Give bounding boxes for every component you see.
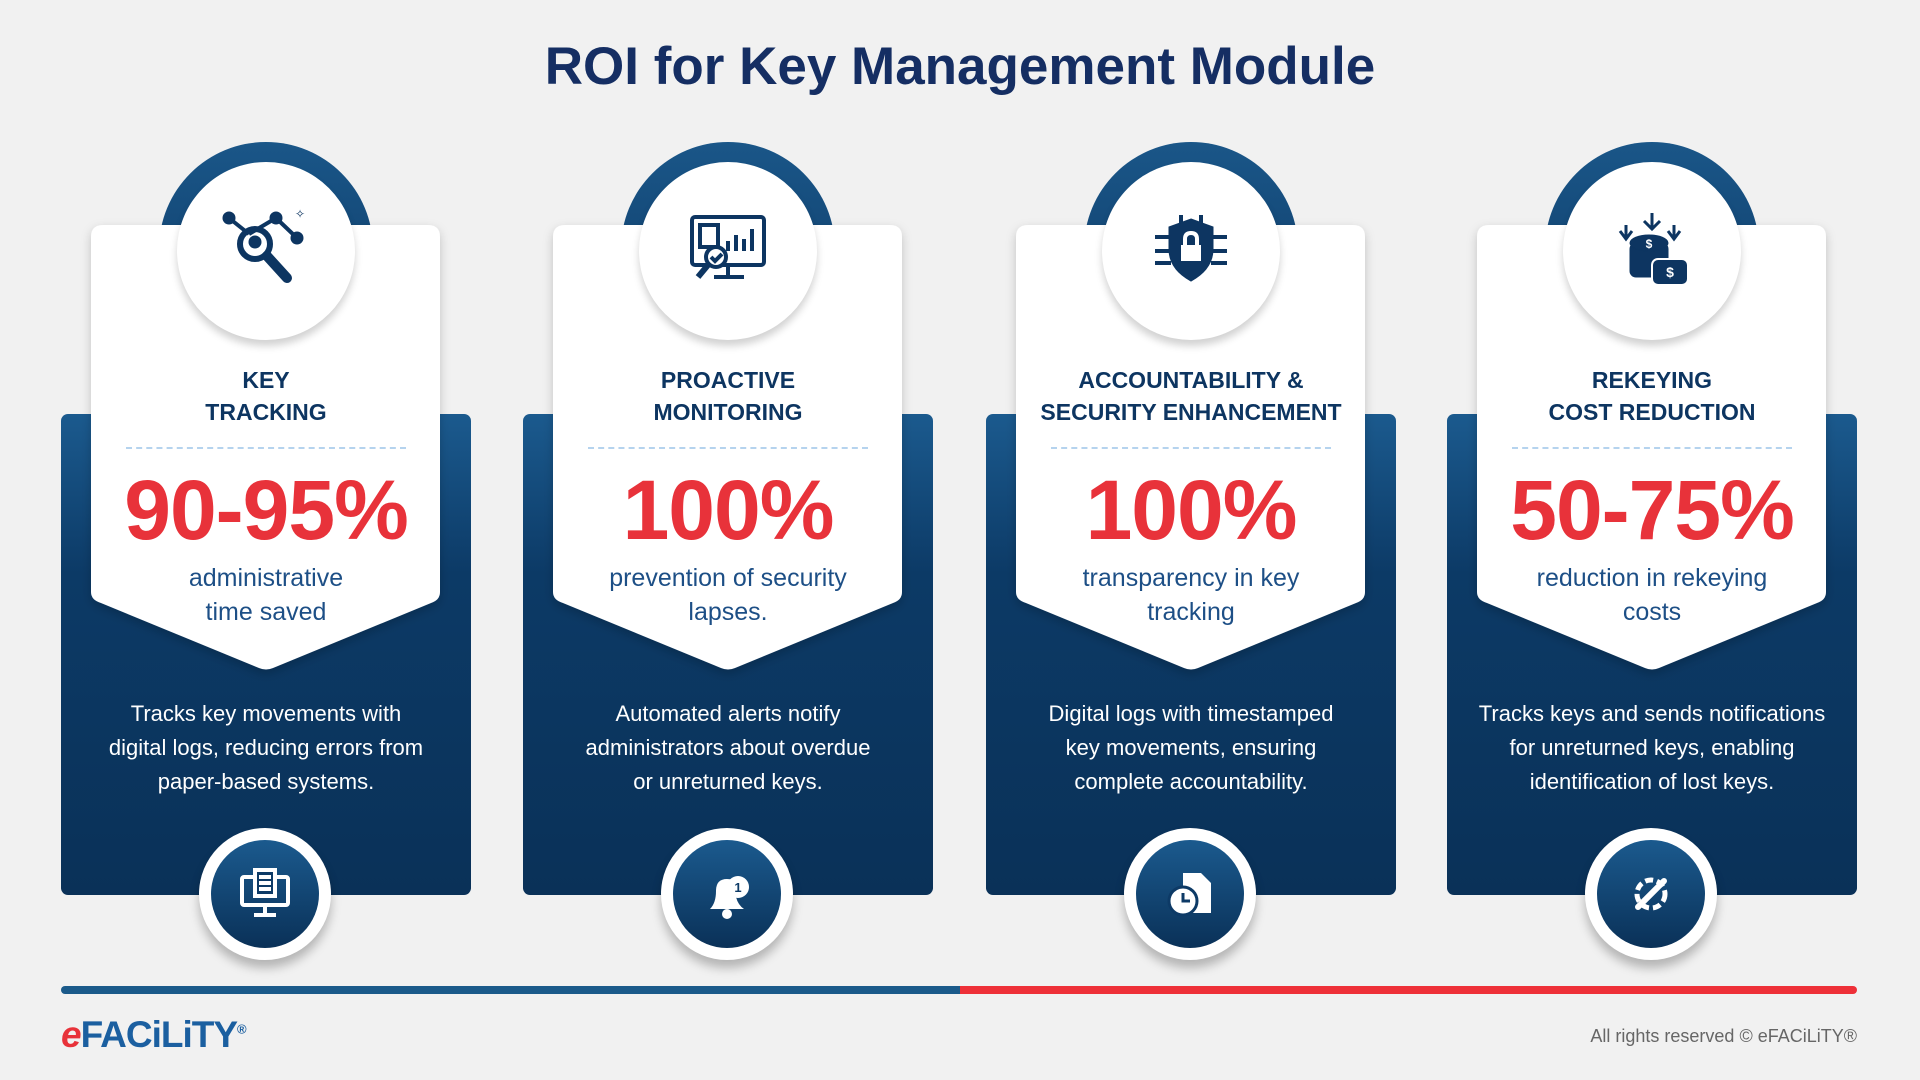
stat: 90-95%	[124, 463, 408, 557]
heading	[1040, 367, 1342, 425]
description: Tracks keys and sends notifications	[1479, 701, 1825, 726]
title: ROI for Key Management Module	[545, 37, 1375, 96]
panel: rekeying cost: reduction in rekeying	[1537, 564, 1767, 592]
description	[586, 701, 870, 794]
copyright: All rights reserved © eFACiLiTY®	[1590, 1026, 1857, 1046]
icon: gear wrench	[1585, 828, 1717, 960]
description: key movements, ensuring	[1066, 735, 1316, 760]
heading	[205, 367, 327, 425]
panel: accountability	[986, 142, 1396, 973]
icon: computer	[199, 828, 331, 960]
icon: network magnifier	[177, 162, 355, 340]
panel: accountability: tracking	[1147, 598, 1235, 626]
description: complete accountability.	[1074, 769, 1308, 794]
description: Digital logs with timestamped	[1049, 701, 1333, 726]
progress bar	[61, 986, 1857, 994]
panel: key tracking	[61, 142, 471, 973]
description	[1049, 701, 1333, 794]
icon: shield lock	[1102, 162, 1280, 340]
description: or unreturned keys.	[633, 769, 823, 794]
icon: coins	[1563, 162, 1741, 340]
icon: bell	[661, 828, 793, 960]
description: for unreturned keys, enabling	[1510, 735, 1794, 760]
icon: document clock	[1124, 828, 1256, 960]
icon: coins: $	[1666, 264, 1674, 280]
heading: KEY	[242, 367, 290, 393]
panel: proactive monitoring: lapses.	[688, 598, 768, 626]
heading: MONITORING	[653, 399, 803, 425]
description	[109, 701, 423, 794]
heading: COST REDUCTION	[1548, 399, 1756, 425]
panel: proactive monitoring: prevention of security	[609, 564, 847, 592]
heading	[1548, 367, 1756, 425]
description: administrators about overdue	[586, 735, 870, 760]
panel: rekeying cost: costs	[1623, 598, 1681, 626]
icon: bell: 1	[734, 880, 742, 895]
heading: REKEYING	[1592, 367, 1712, 393]
description: digital logs, reducing errors from	[109, 735, 423, 760]
description: paper-based systems.	[158, 769, 374, 794]
panel: key tracking: administrative	[189, 564, 343, 592]
icon: monitor with chart	[639, 162, 817, 340]
panel: accountability: transparency in key	[1083, 564, 1299, 592]
panel: rekeying cost	[1447, 142, 1857, 973]
logo: eFACiLiTY®	[61, 1014, 246, 1055]
stat: 100%	[1086, 463, 1296, 557]
stat: 100%	[623, 463, 833, 557]
heading: SECURITY ENHANCEMENT	[1040, 399, 1342, 425]
description	[1479, 701, 1825, 794]
description: Tracks key movements with	[131, 701, 401, 726]
panel: proactive monitoring	[523, 142, 933, 973]
heading: PROACTIVE	[661, 367, 795, 393]
panel: key tracking: time saved	[206, 598, 326, 626]
heading: TRACKING	[205, 399, 327, 425]
icon: coins: $	[1646, 237, 1653, 251]
stat: 50-75%	[1510, 463, 1794, 557]
description: identification of lost keys.	[1530, 769, 1774, 794]
heading: ACCOUNTABILITY &	[1078, 367, 1304, 393]
heading	[653, 367, 803, 425]
icon: network magnifier: ✧	[295, 207, 305, 221]
description: Automated alerts notify	[615, 701, 840, 726]
